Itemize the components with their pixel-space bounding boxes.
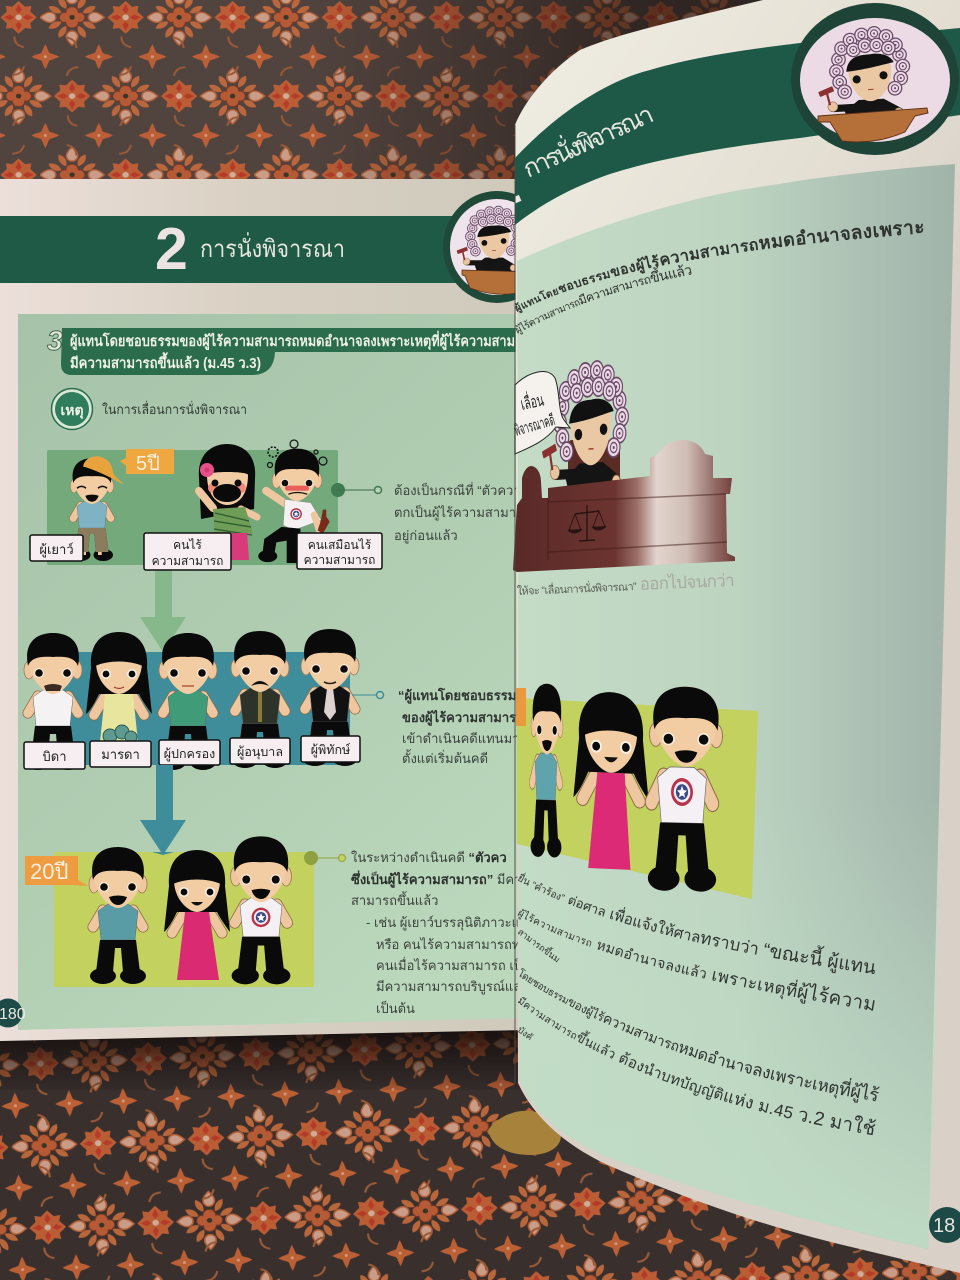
note: ward status: ต้องเป็นกรณีที่ “ตัวควา	[394, 481, 521, 498]
lower line 2: ผู้ไร้ความสามารถ หมดอำนาจลงแล้ว เพราะเหตุที่ผู้ไร้ความ	[518, 908, 875, 1011]
label: curator: ผู้พิทักษ์	[311, 743, 351, 758]
character: woman in pink	[573, 691, 649, 871]
panel: left book page	[0, 179, 551, 1041]
character: curator	[301, 629, 359, 766]
tag: 20 years	[25, 856, 88, 886]
label: custodian: ผู้อนุบาล	[237, 745, 283, 760]
section number 3: 3	[47, 325, 63, 356]
badge: เหตุ	[52, 388, 92, 430]
lower line 5: มีความสามารถขึ้นแล้ว ต้องนำบทบัญญัติแห่ง ม.45 ว.2 มาใช้	[518, 997, 876, 1136]
note: regained capacity: สามารถขึ้นแล้ว	[351, 891, 438, 908]
yellow-green scene: adults, right page	[516, 683, 758, 899]
right header title: การนั่งพิจารณา	[525, 110, 654, 177]
judge's bench scene	[513, 359, 735, 572]
left header title: การนั่งพิจารณา	[200, 232, 345, 263]
note: regained capacity: เป็นต้น	[376, 999, 415, 1016]
yellow-green scene: now capable adults	[25, 836, 314, 987]
tag: 5 years	[120, 449, 174, 475]
left header number: 2	[155, 216, 188, 282]
note: regained capacity: หรือ คนไร้ความสามารถท	[376, 937, 520, 952]
section heading line 2: มีความสามารถขึ้นแล้ว (ม.45 ว.3)	[70, 352, 261, 372]
right page green header band	[515, 28, 960, 225]
character: drunk quasi-incompetent man	[258, 449, 330, 563]
label: guardian: ผู้ปกครอง	[164, 747, 215, 762]
background: patterned fabric, top	[0, 0, 960, 190]
decoration: golden bookmark tassel	[488, 1111, 561, 1155]
label: incapacitated person: คนไร้	[173, 538, 202, 552]
right page intro text	[514, 223, 924, 335]
connector: teal scene to note	[352, 692, 384, 698]
decoration: gutter shadow	[514, 125, 516, 1083]
label: minor: ผู้เยาว์	[39, 542, 74, 558]
note: regained capacity: มีความสามารถบริบูรณ์แล	[376, 979, 521, 995]
label: quasi-incompetent person	[297, 533, 382, 569]
label: quasi-incompetent person: คนเสมือนไร้	[308, 538, 372, 552]
label: minor	[30, 535, 83, 561]
label: mother	[90, 741, 151, 767]
tag: 5 years: 5ปี	[136, 453, 160, 475]
lower line 6: บังคับ	[518, 1026, 534, 1040]
caption below bench, with glare: ให้จะ “เลื่อนการนั่งพิจารณา” ออกไปจนกว่า	[517, 573, 734, 595]
character: custodian	[231, 631, 289, 768]
background: patterned fabric, bottom	[0, 1030, 960, 1280]
note: regained capacity: ในระหว่างดำเนินคดี “ตัวคว	[351, 850, 507, 865]
character: narrow man, blue shirt	[531, 683, 563, 858]
speech bubble: adjourning the case: เลื่อน	[518, 389, 546, 414]
note: statutory representative: เข้าดำเนินคดีแทนมา	[402, 731, 519, 746]
badge caption: ในการเลื่อนการนั่งพิจารณา	[102, 401, 247, 417]
green scene: minor, incapacitated and quasi-incompetent persons	[30, 440, 382, 570]
panel: right book page	[513, 0, 960, 1273]
label: mother: มารดา	[101, 747, 140, 762]
speech bubble: adjourning the case: พิจารณาคดี	[512, 411, 557, 440]
tag: 20 years: 20ปี	[30, 859, 68, 884]
arrow: teal, guardians to adults	[140, 765, 186, 855]
connector: green scene to note	[331, 483, 382, 497]
judge's chair	[568, 440, 620, 490]
section heading line 1: ผู้แทนโดยชอบธรรมของผู้ไร้ความสามารถหมดอำนาจลงเพราะเหตุที่ผู้ไร้ความสาม	[70, 330, 515, 350]
character: 5-year-old boy	[70, 456, 124, 561]
label: incapacitated person	[144, 533, 231, 570]
note: ward status: อยู่ก่อนแล้ว	[394, 528, 458, 544]
section 3 heading ribbon	[47, 325, 525, 375]
teal scene: statutory representatives	[24, 629, 360, 770]
character: man with shield shirt	[648, 686, 723, 892]
right header number: 2	[484, 154, 528, 219]
lower line 3: สามารถขึ้นมา	[518, 930, 560, 962]
character: guardian	[159, 633, 217, 770]
arrow tip overlap	[152, 852, 174, 855]
note: statutory representative: ตั้งแต่เริ่มต้นคดี	[402, 749, 488, 766]
lower line 1: ยื่น “คำร้อง” ต่อศาล เพื่อแจ้งให้ศาลทราบว่า “ขณะนี้ ผู้แทน	[518, 872, 875, 974]
character: adult man, white shirt	[231, 836, 291, 984]
note: ward status: ตกเป็นผู้ไร้ความสามา	[394, 503, 516, 521]
label: guardian	[159, 740, 220, 765]
bench	[513, 440, 735, 572]
character: father	[24, 633, 82, 770]
page number 180	[0, 998, 26, 1028]
note: statutory representative: “ผู้แทนโดยชอบธรรม	[398, 687, 516, 704]
character: adult woman, pink dress	[164, 850, 230, 980]
character: incapacitated woman	[199, 444, 257, 560]
page number 18x	[929, 1207, 960, 1243]
note: regained capacity: ซึ่งเป็นผู้ไร้ความสามารถ” มีคว	[351, 870, 521, 888]
icon: dizzy bubbles	[268, 440, 327, 468]
note: regained capacity: คนเมื่อไร้ความสามารถ เป็น	[376, 956, 531, 973]
label: father: บิดา	[42, 749, 66, 764]
label: custodian	[230, 738, 290, 764]
left page green header band	[0, 216, 480, 283]
left page content panel	[18, 314, 525, 1030]
note: regained capacity: - เช่น ผู้เยาว์บรรลุนิติภาวะแล	[366, 915, 528, 931]
character: mother	[86, 632, 152, 743]
note: ward status	[394, 481, 521, 544]
label: father	[24, 742, 85, 769]
page number 18x: 18	[933, 1215, 955, 1237]
label: incapacitated person: ความสามารถ	[152, 554, 223, 568]
character: judge with gavel	[542, 359, 628, 496]
intro line 1: ผู้แทนโดยชอบธรรมของผู้ไร้ความสามารถหมดอำนาจลงเพราะ	[514, 223, 924, 314]
intro line 2: ผู้ไร้ความสามารถมีความสามารถขึ้นแล้ว	[515, 264, 692, 335]
speech bubble: adjourning the case	[512, 372, 570, 454]
lower line 4: โดยชอบธรรมของผู้ไร้ความสามารถหมดอำนาจลงเพราะเหตุที่ผู้ไร้	[520, 968, 880, 1103]
right page content panel	[517, 164, 955, 1249]
icon: judge medallion, left page	[443, 191, 551, 303]
connector: adults scene to note	[304, 851, 346, 865]
character: adult man, blue shirt	[89, 847, 147, 984]
note: statutory representative	[398, 687, 519, 766]
arrow: green, scene to guardians	[140, 565, 186, 652]
icon: judge medallion, right page	[791, 3, 959, 155]
label: quasi-incompetent person: ความสามารถ	[304, 553, 375, 567]
note: regained capacity	[351, 850, 531, 1016]
tag: 20 years, partly hidden	[516, 688, 526, 726]
label: curator	[301, 736, 360, 762]
note: statutory representative: ของผู้ไร้ความสามาร	[402, 709, 516, 726]
icon: scales of justice	[568, 505, 606, 541]
badge: เหตุ: เหตุ	[60, 402, 84, 419]
